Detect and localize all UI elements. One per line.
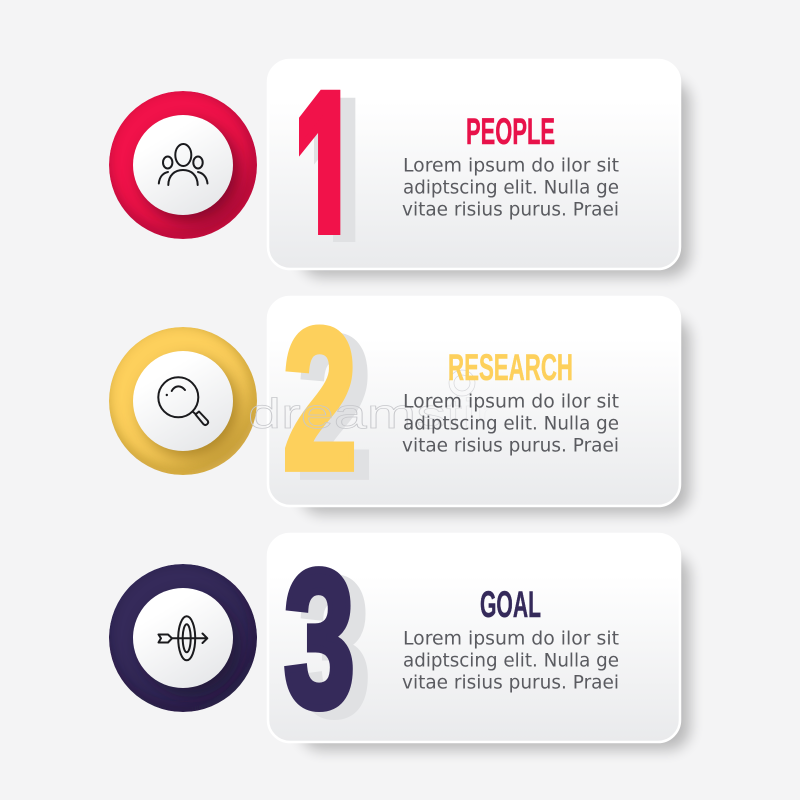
number 2: 2 (283, 287, 357, 510)
red ring badge (109, 91, 257, 239)
card 2 (268, 297, 690, 514)
title: people: PEOPLE (466, 111, 555, 152)
panel: research row (101, 287, 690, 518)
body text 1: vitae risius purus. Praei (402, 198, 619, 220)
watermark (248, 370, 558, 437)
body text 2: adiptscing elit. Nulla ge (403, 412, 619, 434)
watermark: dreamstime (248, 390, 558, 437)
number 3: 3 (299, 538, 370, 755)
panel: people row (109, 59, 697, 284)
white disc with people icon (133, 115, 233, 215)
white disc with target icon (133, 588, 233, 688)
body text 2 (402, 390, 619, 456)
number 1: 1 (306, 50, 376, 330)
body text 3 (402, 628, 619, 694)
number 1 (299, 90, 356, 242)
body text 3: vitae risius purus. Praei (402, 672, 619, 694)
body text 3: adiptscing elit. Nulla ge (403, 650, 619, 672)
navy ring badge (109, 564, 257, 712)
title: research: RESEARCH (448, 347, 573, 388)
body text 2: vitae risius purus. Praei (402, 434, 619, 456)
white disc with magnifier icon (133, 351, 233, 451)
body text 2: Lorem ipsum do ilor sit (403, 390, 619, 412)
number 1: 1 (291, 42, 361, 322)
body text 1: Lorem ipsum do ilor sit (403, 154, 619, 176)
card 3 (268, 534, 690, 750)
number 2: 2 (298, 295, 372, 518)
yellow ring badge (109, 327, 257, 475)
card 1 (268, 60, 690, 277)
body text 1 (402, 154, 619, 220)
title: goal: GOAL (480, 584, 541, 625)
number 3: 3 (284, 530, 355, 747)
body text 1: adiptscing elit. Nulla ge (403, 176, 619, 198)
body text 3: Lorem ipsum do ilor sit (403, 628, 619, 650)
panel: goal row (101, 530, 690, 755)
